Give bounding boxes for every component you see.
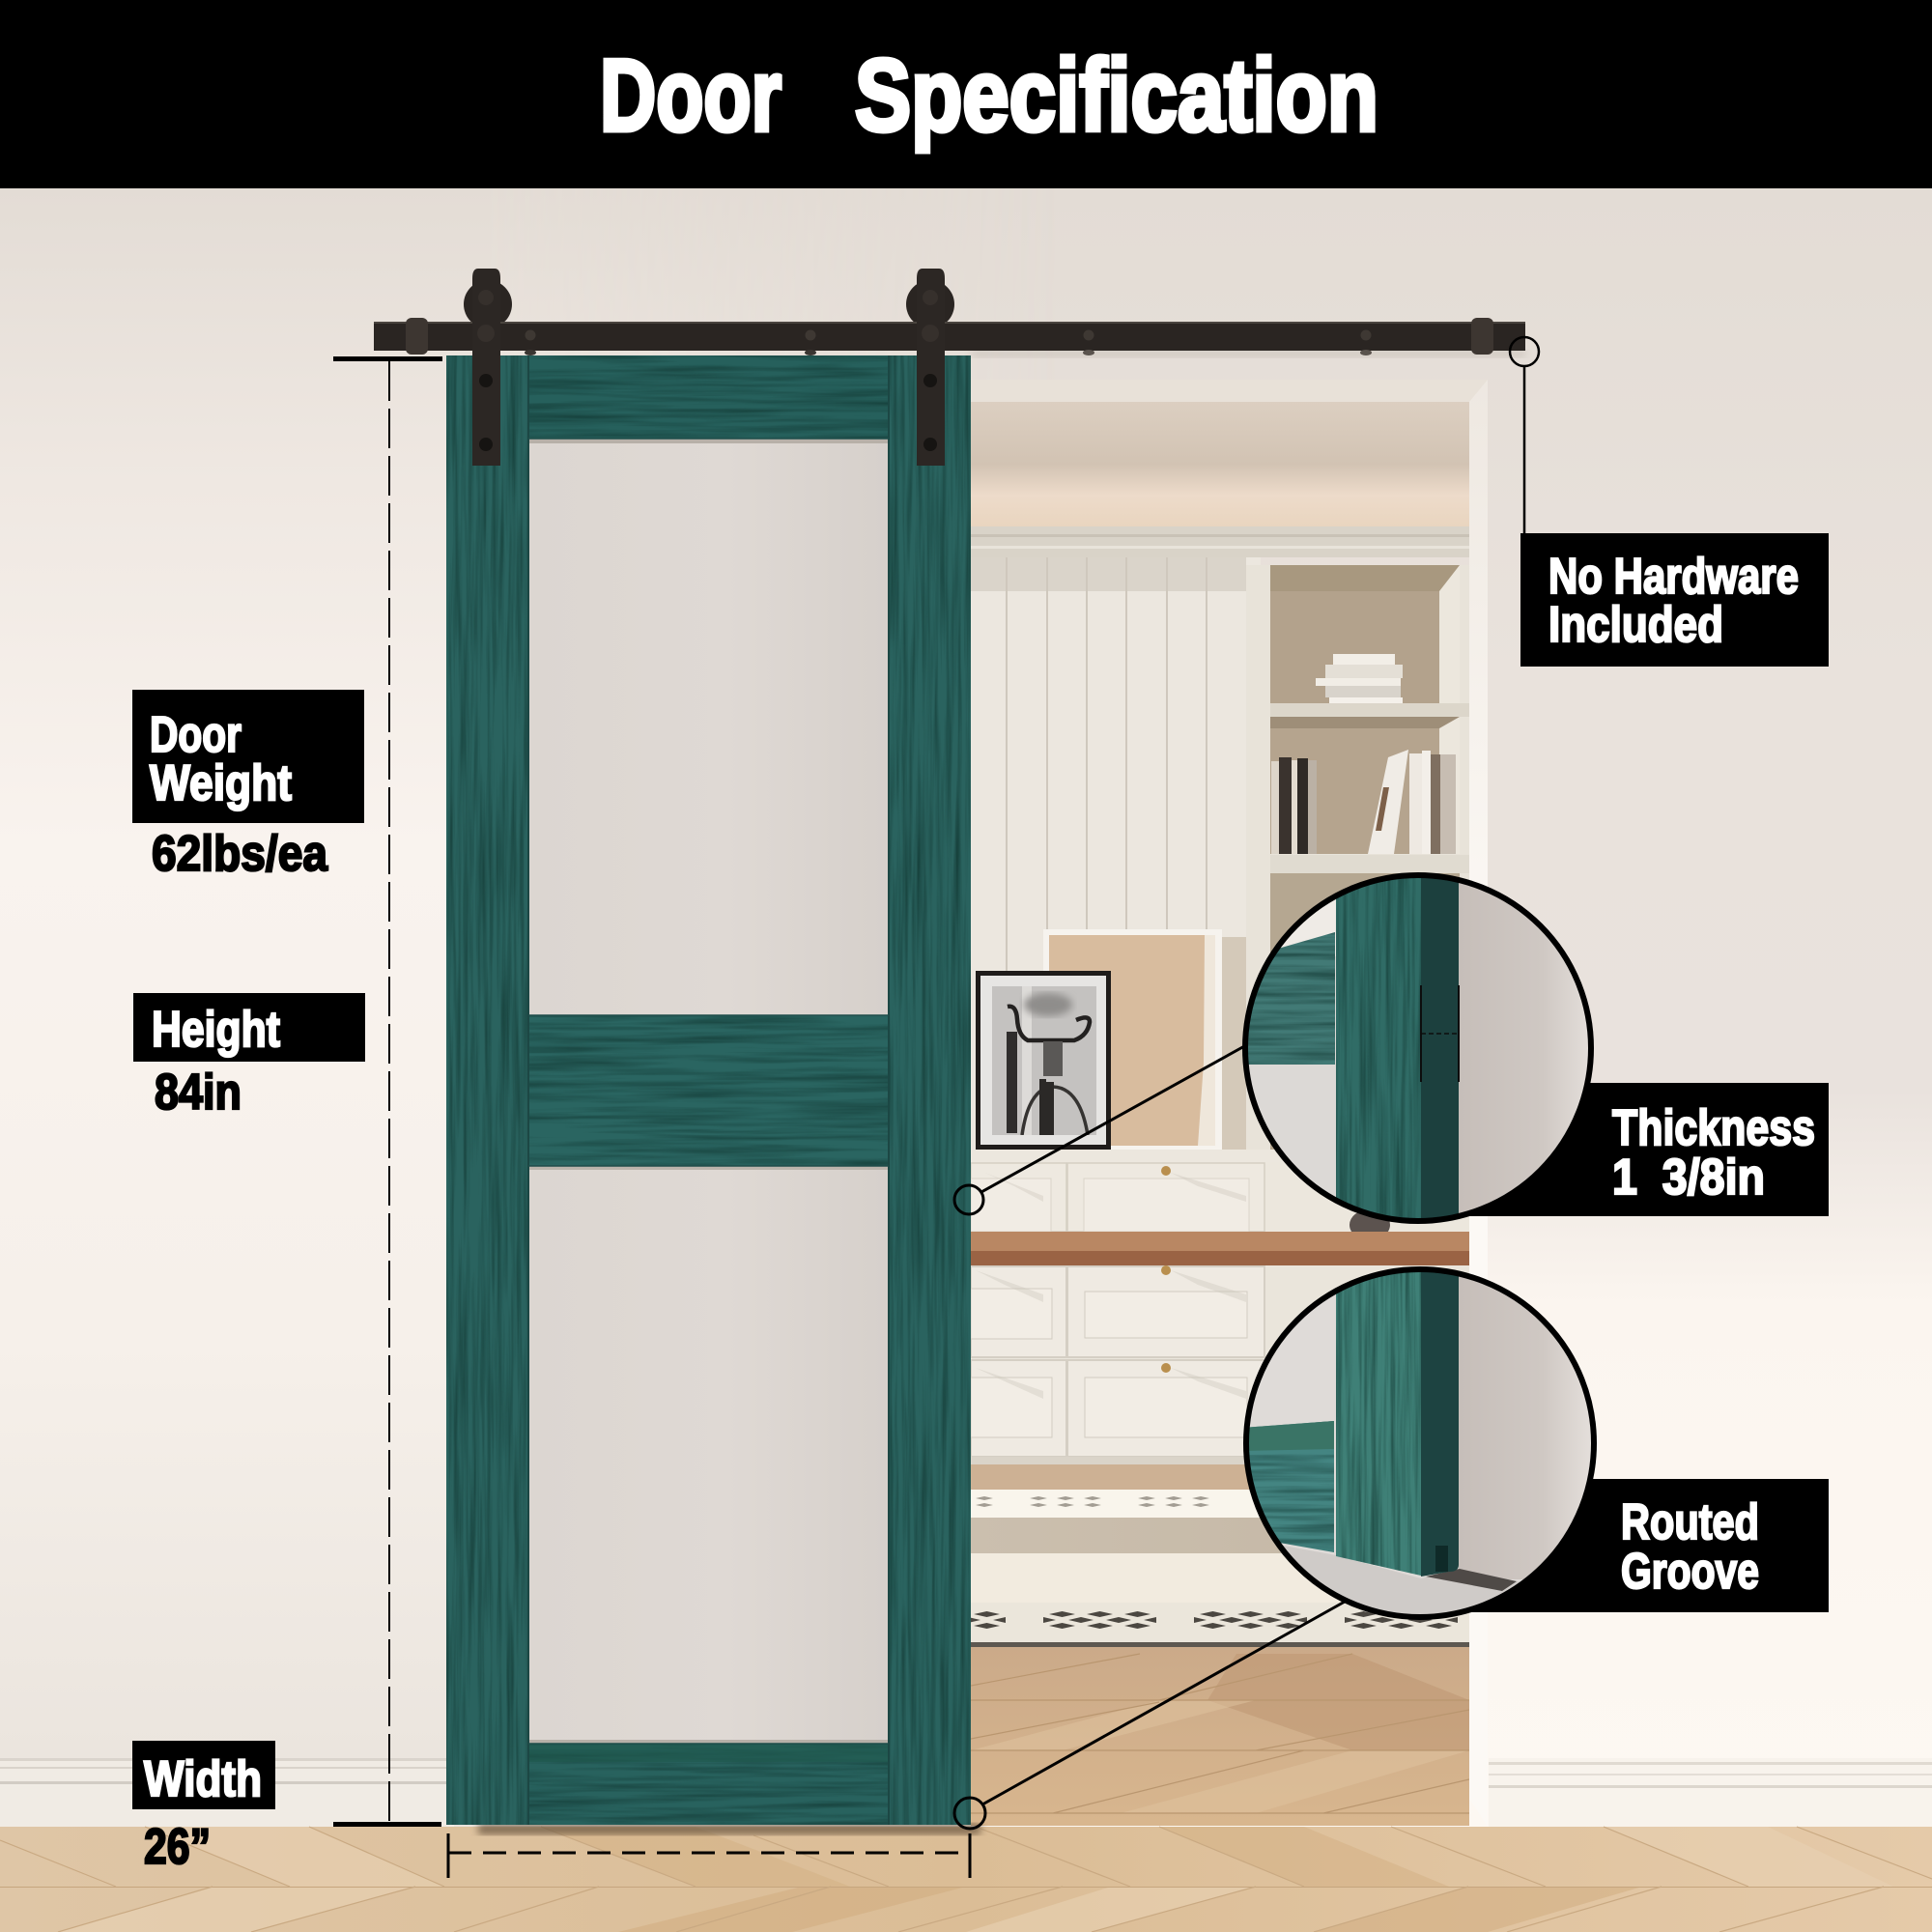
hanger strap: left xyxy=(472,269,500,466)
width dimension line xyxy=(448,1833,970,1878)
label: routed groove: Routed xyxy=(1621,1494,1759,1550)
rail shadow on wall xyxy=(971,350,1525,357)
hanger strap: right xyxy=(917,269,945,466)
books: lower row xyxy=(1271,750,1456,854)
glass panel: upper xyxy=(528,439,889,1015)
label: routed groove xyxy=(1430,1479,1829,1612)
height dimension line xyxy=(333,356,442,1827)
lower cabinets xyxy=(971,1265,1469,1464)
label: door weight: Door xyxy=(150,707,242,763)
glass panel: lower xyxy=(528,1166,889,1744)
label: no hardware included: No Hardware xyxy=(1548,549,1799,605)
label: thickness: Thickness xyxy=(1612,1100,1815,1156)
sliding track rail xyxy=(374,318,1525,355)
books: top stack xyxy=(1316,654,1403,703)
title: Specification xyxy=(855,39,1378,153)
wall: left xyxy=(0,458,608,1827)
label: width: Width xyxy=(144,1751,262,1807)
title xyxy=(600,39,1378,153)
room floor strip xyxy=(971,1464,1250,1490)
leader: rail to no hardware label xyxy=(1510,337,1539,533)
bookshelf xyxy=(1246,565,1469,1164)
bottom rail xyxy=(528,1744,889,1825)
right stile xyxy=(889,355,971,1825)
doorway opening: room interior xyxy=(968,402,1469,1827)
hanger wheel: left xyxy=(464,280,512,328)
label: height xyxy=(133,993,365,1062)
left stile xyxy=(446,355,528,1825)
label: routed groove: Groove xyxy=(1621,1544,1759,1600)
herringbone room floor xyxy=(971,1647,1469,1827)
baseboard: right xyxy=(1489,1758,1932,1827)
upper cabinets xyxy=(971,1162,1469,1232)
label: thickness: 1 3/8in xyxy=(1612,1150,1765,1206)
barn door xyxy=(446,355,971,1825)
contact shadow xyxy=(1426,1569,1517,1591)
hanger wheel: right xyxy=(906,280,954,328)
doorway frame xyxy=(971,380,1488,1827)
floor xyxy=(0,1827,1932,1932)
wood countertop xyxy=(971,1232,1469,1265)
middle rail xyxy=(528,1015,889,1166)
groove notch xyxy=(1435,1546,1448,1572)
round object xyxy=(1350,1213,1390,1232)
leader: door edge to thickness detail xyxy=(954,1045,1246,1214)
rail bolts xyxy=(525,330,1372,355)
label: door weight xyxy=(132,690,364,823)
floor wedge xyxy=(1283,1546,1520,1614)
rail stoppers xyxy=(406,318,428,355)
value: door weight: 62lbs/ea xyxy=(152,826,328,882)
label: no hardware included xyxy=(1520,533,1829,667)
label: door weight: Weight xyxy=(150,755,292,811)
detail circle: thickness xyxy=(1236,869,1604,1236)
value: width: 26” xyxy=(144,1819,211,1875)
label: no hardware included: Included xyxy=(1548,597,1723,653)
baseboard: left xyxy=(0,1758,454,1827)
crown moulding xyxy=(971,526,1469,557)
title bar xyxy=(0,0,1932,188)
ceiling xyxy=(971,402,1469,527)
rug xyxy=(968,1490,1469,1647)
hinge seam xyxy=(1421,985,1459,1082)
panelled wall xyxy=(971,557,1246,971)
small framed photo: bicycle xyxy=(976,971,1111,1150)
counter shelf xyxy=(1270,1150,1285,1162)
label: thickness xyxy=(1430,1083,1829,1216)
label: height: Height xyxy=(152,1002,280,1058)
value: height: 84in xyxy=(155,1065,242,1121)
detail circle: routed groove xyxy=(1236,1261,1604,1633)
door shadow on floor xyxy=(478,1824,980,1834)
leader: door bottom to routed groove detail xyxy=(954,1602,1345,1829)
door-bottom rail xyxy=(1241,1421,1334,1552)
large framed art xyxy=(1043,929,1246,1150)
title: Door xyxy=(600,39,781,153)
top rail xyxy=(528,355,889,439)
